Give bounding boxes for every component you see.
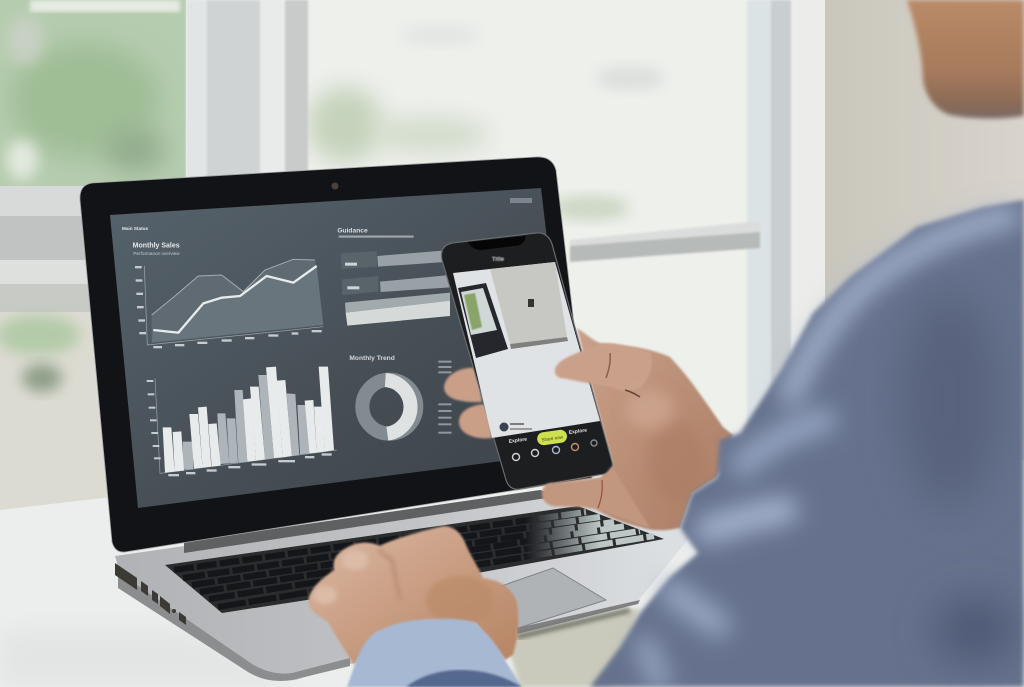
window frame verticals (186, 0, 825, 440)
phone title: Title (492, 257, 505, 263)
shirt dark core (900, 290, 1015, 660)
cuff shadow (406, 670, 522, 687)
lower left window pane (0, 312, 115, 512)
screen heading: Performance overview (133, 251, 180, 256)
room picture (458, 283, 508, 358)
right window crossbar (570, 221, 760, 262)
top right status text (510, 198, 532, 203)
hand creases and shading (598, 353, 703, 508)
shirt cuff on left arm (347, 619, 522, 687)
laptop base (115, 495, 690, 681)
base front edge (118, 572, 350, 681)
touchpad (490, 568, 606, 628)
shirt highlights (645, 216, 1010, 682)
phone nav icons (512, 440, 597, 460)
phone tab labels: Explore (508, 436, 528, 445)
screen heading: Main Status (122, 226, 149, 231)
ports (115, 563, 186, 625)
phone yellow button (536, 429, 568, 446)
thumb and lower finger (542, 344, 652, 528)
side legend (438, 361, 452, 434)
phone caption (500, 422, 532, 432)
phone image (453, 262, 600, 438)
laptop (80, 157, 690, 681)
person face (907, 0, 1024, 118)
hand shading and knuckles (313, 550, 494, 624)
laptop lid (80, 157, 592, 552)
donut chart heading: Monthly Trend (349, 355, 395, 362)
phone tab labels (508, 427, 588, 445)
phone tab labels: Explore (568, 427, 588, 436)
table heading: Guidance (337, 228, 368, 235)
phone body (441, 233, 612, 489)
donut chart (362, 380, 416, 434)
desk (0, 496, 700, 687)
webcam (332, 182, 338, 190)
screen heading: Monthly Sales (133, 242, 180, 249)
phone (441, 233, 612, 489)
phone notch (468, 236, 526, 250)
phone hand back (444, 328, 733, 530)
hinge (184, 490, 560, 553)
bar chart (147, 367, 337, 476)
line chart (135, 259, 323, 348)
fingers behind phone (444, 368, 492, 438)
dashboard artwork (122, 226, 452, 476)
hand on keyboard (309, 526, 518, 665)
wall switch (528, 299, 534, 307)
progress rows (341, 250, 450, 326)
wall (825, 0, 1024, 460)
under-base shadow (517, 610, 630, 637)
centre window pane (307, 25, 665, 220)
person shirt (590, 200, 1024, 687)
phone yellow button: Share now (541, 434, 564, 442)
left window pane with greenery (0, 0, 186, 188)
screen heading (122, 226, 180, 256)
keyboard (165, 506, 664, 613)
table heading (337, 228, 414, 238)
laptop screen (110, 188, 572, 508)
window sill horizontals (0, 186, 130, 312)
